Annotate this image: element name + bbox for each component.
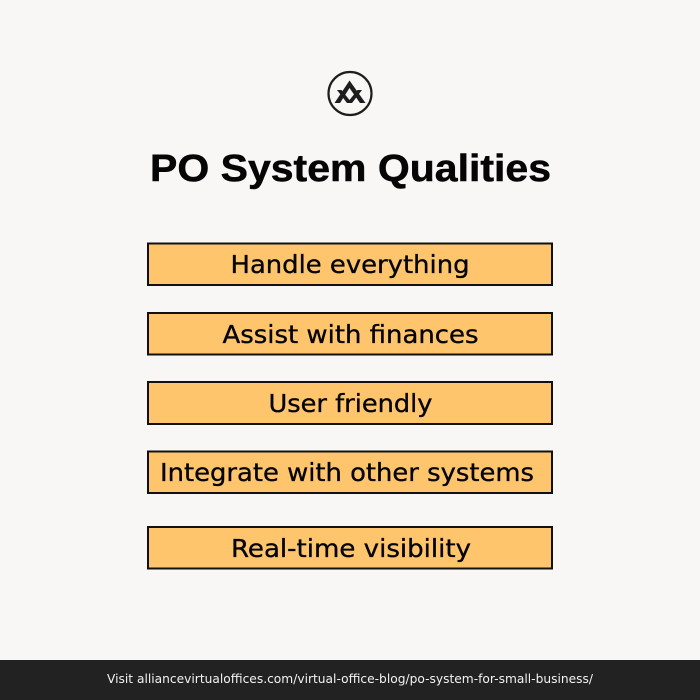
item: User friendly bbox=[148, 382, 552, 424]
footer bar bbox=[0, 660, 700, 700]
logo icon: mountain in circle bbox=[328, 72, 372, 115]
item: Real-time visibility bbox=[148, 527, 552, 568]
item: Assist with finances: Assist with finances bbox=[222, 320, 478, 349]
item: Real-time visibility: Real-time visibility bbox=[231, 534, 471, 563]
title: PO System Qualities bbox=[150, 148, 551, 190]
item: User friendly: User friendly bbox=[268, 389, 433, 418]
item: Integrate with other systems: Integrate with other systems bbox=[160, 458, 534, 487]
footer bar: Visit alliancevirtualoffices.com/virtual-office-blog/po-system-for-small-business/ bbox=[107, 671, 594, 686]
item: Assist with finances bbox=[148, 313, 552, 354]
item: Handle everything bbox=[148, 244, 552, 285]
item: Integrate with other systems bbox=[148, 452, 552, 493]
item: Handle everything: Handle everything bbox=[230, 250, 470, 279]
